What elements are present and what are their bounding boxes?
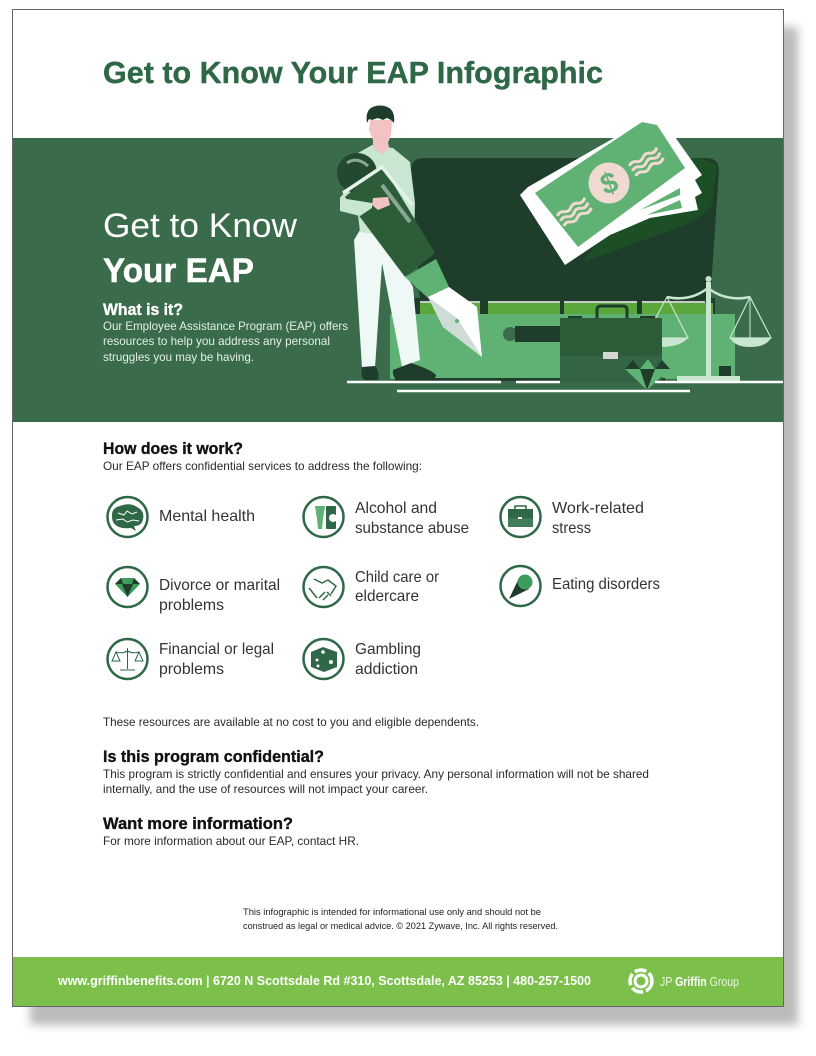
item: child care	[304, 567, 440, 607]
item: mental health: Mental health	[159, 508, 255, 525]
confidentiality section: internally, and the use of resources will not impact your career.	[103, 782, 428, 796]
what is it text: What is it?	[103, 300, 183, 319]
item: child care: Child care or	[355, 569, 440, 586]
logo mark	[630, 970, 652, 992]
confidentiality section	[103, 747, 649, 796]
item: financial	[108, 639, 274, 679]
item: financial: Financial or legal	[159, 641, 274, 658]
illustration: wallet	[390, 158, 735, 381]
title: Get to Know Your EAP Infographic	[103, 56, 603, 90]
item: mental health	[108, 497, 255, 537]
disclaimer: This infographic is intended for informational use only and should not be	[243, 907, 541, 917]
hero heading	[103, 207, 297, 290]
how does it work section: How does it work?	[103, 439, 243, 458]
item: work stress: Work-related	[552, 500, 644, 517]
item: gambling: Gambling	[355, 641, 421, 658]
confidentiality section: Is this program confidential?	[103, 747, 324, 766]
item: financial: problems	[159, 661, 224, 678]
illustration: man with pen	[337, 106, 482, 380]
disclaimer	[243, 907, 558, 931]
illustration: money: $	[596, 166, 622, 202]
hero heading: Your EAP	[103, 252, 254, 290]
illustration: money	[520, 122, 717, 265]
more information section	[103, 814, 359, 848]
illustration: diamond	[625, 359, 670, 390]
illustration: ground lines	[347, 382, 783, 391]
item: alcohol: substance abuse	[355, 520, 469, 537]
item: divorce: problems	[159, 597, 224, 614]
what is it text	[103, 300, 348, 364]
item: child care: eldercare	[355, 588, 419, 605]
how does it work section	[103, 439, 422, 473]
item: gambling	[304, 639, 421, 679]
item: divorce: Divorce or marital	[159, 577, 280, 594]
item: alcohol	[304, 497, 469, 537]
what is it text: Our Employee Assistance Program (EAP) offers	[103, 319, 348, 333]
more information section: For more information about our EAP, contact HR.	[103, 834, 359, 848]
item: work stress: stress	[552, 520, 591, 537]
disclaimer: construed as legal or medical advice. © 2021 Zywave, Inc. All rights reserved.	[243, 921, 558, 931]
how does it work section: Our EAP offers confidential services to address the following:	[103, 459, 422, 473]
footer bar	[13, 957, 783, 1006]
illustration: briefcase	[560, 306, 662, 383]
item: divorce	[108, 567, 280, 614]
what is it text: struggles you may be having.	[103, 350, 254, 364]
logo text: JP Griffin Group	[660, 975, 739, 989]
hero heading: Get to Know	[103, 207, 297, 245]
what is it text: resources to help you address any personal	[103, 334, 330, 348]
availability note: These resources are available at no cost to you and eligible dependents.	[103, 715, 479, 729]
illustration: scales	[645, 276, 771, 381]
footer contact text: www.griffinbenefits.com | 6720 N Scottsdale Rd #310, Scottsdale, AZ 85253 | 480-257-1500	[57, 973, 591, 988]
item: alcohol: Alcohol and	[355, 500, 437, 517]
item: work stress	[500, 497, 644, 537]
more information section: Want more information?	[103, 814, 293, 833]
item: gambling: addiction	[355, 661, 418, 678]
confidentiality section: This program is strictly confidential and ensures your privacy. Any personal information will not be shared	[103, 767, 649, 781]
item: eating disorders	[500, 566, 660, 606]
hero banner	[13, 106, 783, 422]
item: eating disorders: Eating disorders	[552, 576, 660, 593]
